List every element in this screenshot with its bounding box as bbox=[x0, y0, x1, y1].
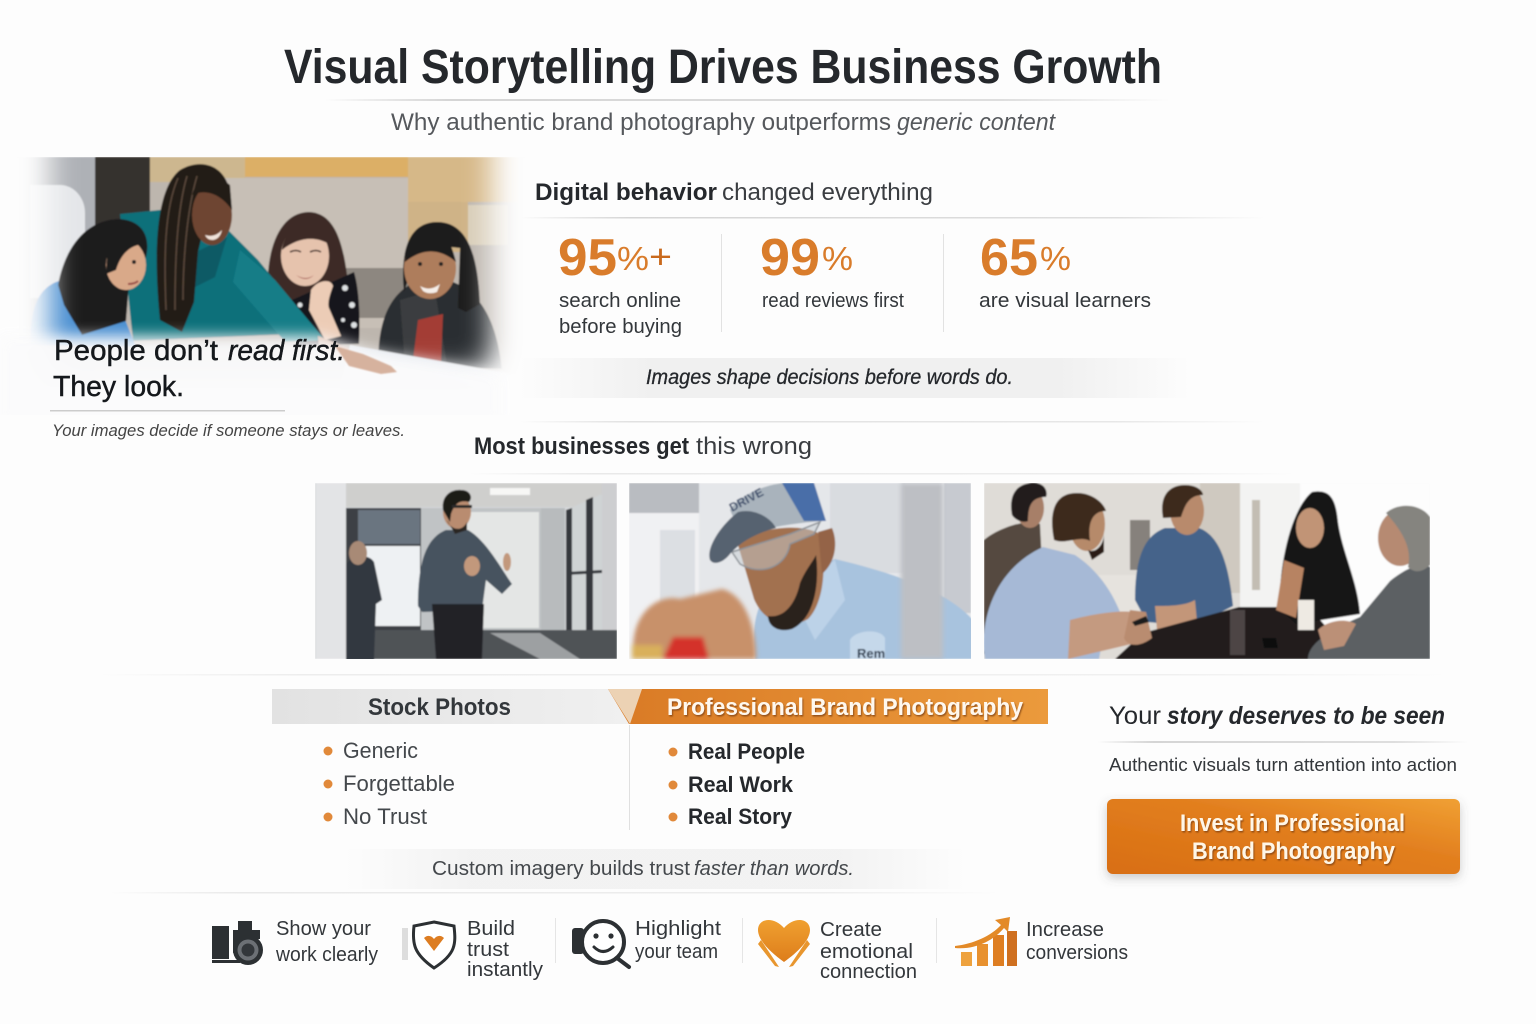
face bbox=[738, 528, 835, 630]
shirt bbox=[754, 559, 972, 661]
subtitle: Why authentic brand photography outperforms bbox=[391, 109, 891, 136]
photo: team meeting at table bbox=[984, 483, 1430, 659]
hero headline: They look. bbox=[53, 371, 184, 403]
title: Visual Storytelling Drives Business Growth bbox=[284, 41, 1162, 94]
call to action button: Brand Photography bbox=[1192, 838, 1396, 865]
hero headline bbox=[53, 335, 345, 403]
table bbox=[1114, 606, 1326, 659]
list: stock photo drawbacks: No Trust bbox=[343, 804, 427, 829]
call to action text: Authentic visuals turn attention into action bbox=[1109, 754, 1457, 775]
stat: 95%+: 95 bbox=[558, 229, 617, 287]
comparison table bbox=[272, 689, 1048, 830]
benefit: show your work clearly bbox=[212, 917, 379, 966]
glasses bbox=[732, 522, 820, 570]
hero headline: People don’t bbox=[54, 335, 218, 367]
list: brand photography benefits bbox=[668, 739, 805, 829]
hero headline: read first. bbox=[228, 335, 345, 367]
call to action button: Invest in Professional bbox=[1180, 810, 1405, 837]
presenter bbox=[418, 490, 512, 659]
benefit: show your work clearly: Show your bbox=[276, 917, 371, 940]
benefit: show your work clearly: work clearly bbox=[275, 943, 379, 966]
front man blue shirt bbox=[984, 493, 1152, 659]
man at back bbox=[346, 541, 382, 660]
heading: most businesses: Most businesses get bbox=[474, 433, 689, 460]
benefit: build trust instantly: Build bbox=[467, 917, 515, 940]
callout band: images shape decisions: Images shape decisions before words do. bbox=[646, 366, 1013, 389]
benefit: highlight your team: your team bbox=[635, 941, 718, 963]
icon: camera bbox=[212, 921, 263, 965]
benefit: increase conversions: conversions bbox=[1026, 941, 1128, 964]
header: stock photos bbox=[272, 689, 630, 724]
list: stock photo drawbacks bbox=[324, 738, 455, 829]
photo: technician in cap and safety glasses bbox=[629, 483, 972, 661]
list: brand photography benefits: Real People bbox=[688, 739, 805, 764]
callout band: custom imagery: faster than words. bbox=[694, 858, 854, 880]
stat: 95%+: % bbox=[617, 240, 649, 277]
heading: most businesses: this wrong bbox=[696, 433, 812, 460]
woman 3 bbox=[268, 212, 359, 346]
woman 4 bbox=[378, 222, 502, 369]
stat: 99%: % bbox=[822, 240, 853, 277]
stat: 99% bbox=[760, 229, 904, 312]
stat: 95%+: search online bbox=[559, 290, 681, 312]
back man left bbox=[984, 483, 1047, 654]
heading: most businesses bbox=[474, 433, 812, 460]
stat: 95%+: + bbox=[649, 238, 672, 275]
subtitle: generic content bbox=[897, 109, 1056, 136]
callout band: custom imagery: Custom imagery builds trust bbox=[432, 858, 690, 880]
icon: magnifier with smile bbox=[572, 921, 629, 967]
benefit: increase conversions: Increase bbox=[1026, 918, 1104, 941]
heading: digital behavior: changed everything bbox=[722, 179, 933, 206]
stat: 65%: % bbox=[1040, 240, 1071, 277]
front man right bbox=[1308, 506, 1430, 659]
woman 1 bbox=[30, 219, 147, 347]
stat: 65%: are visual learners bbox=[979, 290, 1151, 312]
benefit: create emotional connection: Create bbox=[820, 918, 882, 941]
stat: 65%: 65 bbox=[980, 229, 1038, 287]
woman 2 bbox=[119, 163, 340, 346]
call to action button bbox=[1107, 799, 1460, 874]
header: stock photos: Stock Photos bbox=[368, 694, 511, 721]
back man centre bbox=[1135, 485, 1233, 631]
list: stock photo drawbacks: Generic bbox=[343, 738, 418, 763]
call to action heading: story deserves to be seen bbox=[1167, 702, 1445, 730]
icon: growth chart with arrow bbox=[955, 917, 1017, 966]
cap: DRIVE bbox=[727, 485, 766, 515]
icon: shield with heart bbox=[402, 922, 455, 968]
stat: 99%: 99 bbox=[760, 229, 820, 287]
call to action heading: Your bbox=[1109, 702, 1161, 730]
photo: man presenting in office bbox=[315, 483, 617, 660]
benefit: increase conversions bbox=[955, 917, 1128, 966]
shirt: Rem bbox=[857, 646, 885, 661]
stat: 95%+: before buying bbox=[559, 316, 682, 338]
benefit: build trust instantly: instantly bbox=[467, 958, 544, 981]
list: brand photography benefits: Real Story bbox=[688, 804, 793, 829]
benefit: create emotional connection: connection bbox=[820, 960, 917, 983]
woman bbox=[1276, 491, 1360, 630]
hero tagline: Your images decide if someone stays or leaves. bbox=[52, 421, 405, 440]
heading: digital behavior: Digital behavior bbox=[535, 179, 717, 206]
benefit: build trust instantly bbox=[402, 917, 544, 981]
cap bbox=[709, 483, 826, 563]
benefit: highlight your team: Highlight bbox=[635, 917, 721, 940]
stat: 95%+ bbox=[558, 229, 682, 338]
list: stock photo drawbacks: Forgettable bbox=[343, 771, 455, 796]
icon: heart in hands bbox=[758, 920, 810, 967]
benefit: create emotional connection bbox=[758, 918, 917, 983]
list: brand photography benefits: Real Work bbox=[688, 772, 794, 797]
benefit: highlight your team bbox=[572, 917, 721, 967]
header: professional brand photography bbox=[608, 689, 1048, 724]
benefit: create emotional connection: emotional bbox=[820, 940, 913, 963]
callout band: custom imagery bbox=[345, 849, 965, 889]
stat: 99%: read reviews first bbox=[762, 290, 904, 312]
photo: four women looking at plans bbox=[30, 157, 512, 375]
header: professional brand photography: Professional Brand Photography bbox=[667, 694, 1024, 721]
benefit: build trust instantly: trust bbox=[467, 938, 509, 961]
callout band: images shape decisions bbox=[520, 358, 1190, 398]
hand on plans bbox=[335, 346, 397, 374]
heading: digital behavior bbox=[535, 179, 933, 206]
stat: 65% bbox=[979, 229, 1151, 312]
